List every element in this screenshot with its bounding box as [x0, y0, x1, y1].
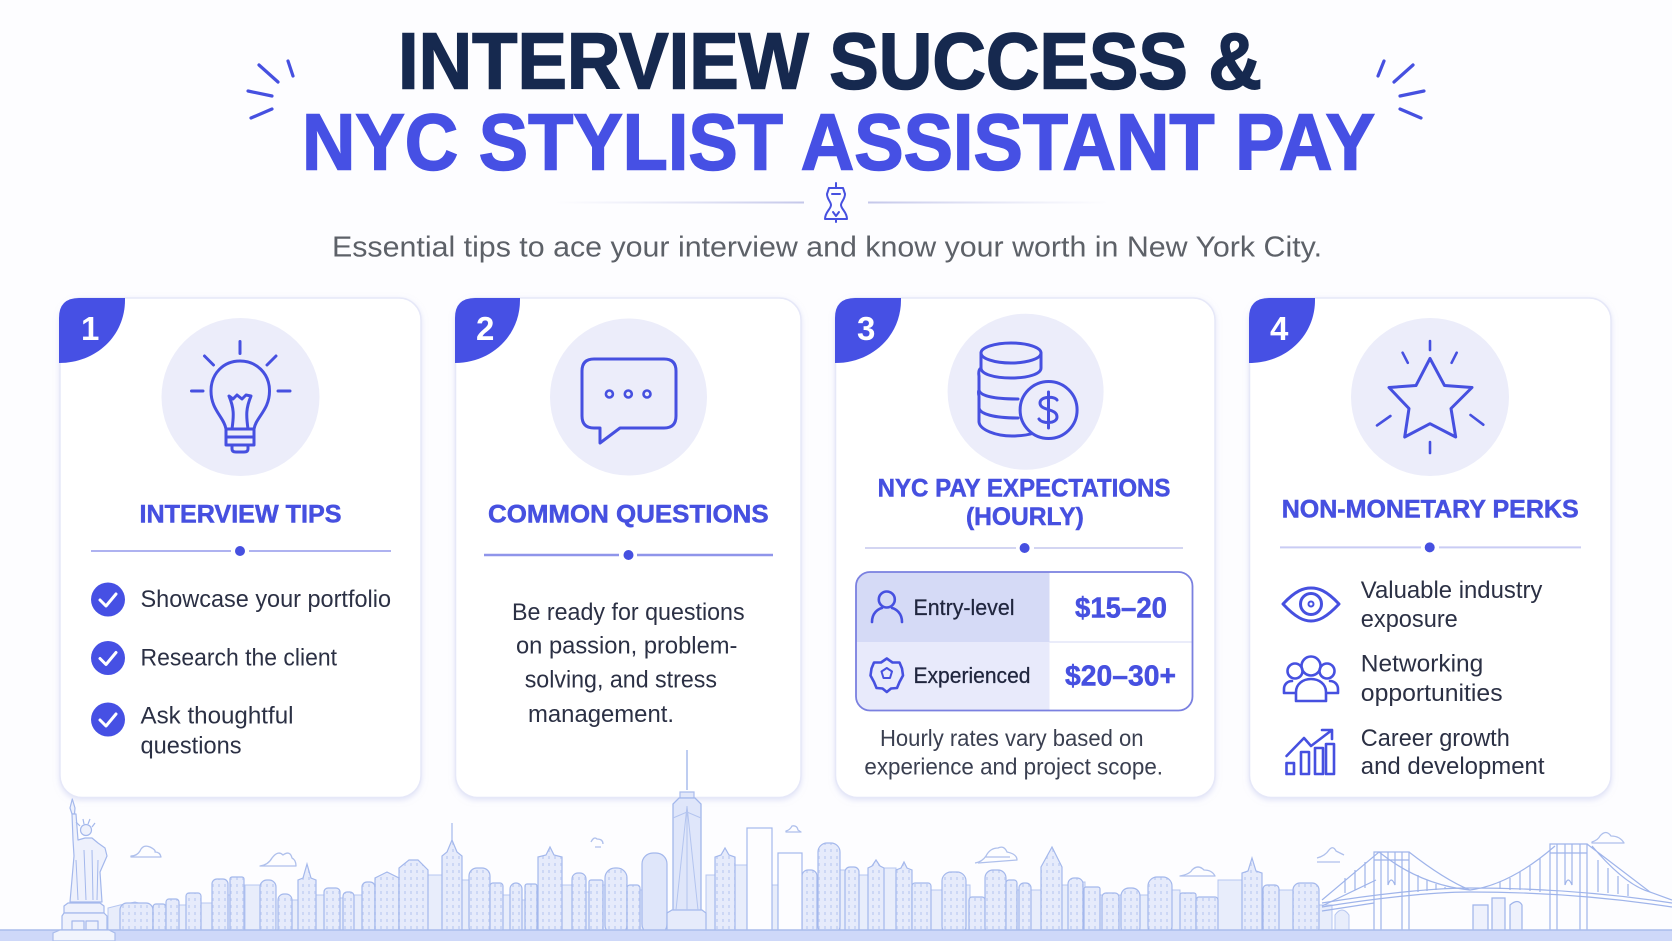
header divider with mannequin icon [555, 183, 1109, 222]
icon: dress form [825, 183, 847, 222]
statue base [53, 930, 115, 941]
icon: growth chart [1286, 730, 1334, 774]
heading: COMMON QUESTIONS [488, 501, 769, 529]
waterfront band [0, 930, 1672, 941]
divider [865, 543, 1183, 553]
body text: management. [528, 701, 674, 728]
icon: one world trade center [667, 750, 706, 935]
panel: pay expectations [835, 298, 1215, 798]
icon: person [872, 592, 902, 622]
title line 1: INTERVIEW SUCCESS & [398, 16, 1262, 106]
perk: career growth: and development [1361, 753, 1545, 780]
check item: questions: questions [140, 732, 242, 759]
body text: on passion, problem- [516, 633, 737, 660]
panel: interview tips [59, 298, 421, 798]
check item: portfolio: Showcase your portfolio [140, 586, 391, 613]
heading [878, 474, 1170, 531]
icon: statue of liberty [62, 799, 107, 935]
icon: eye [1283, 588, 1339, 621]
check item: research: Research the client [140, 644, 337, 671]
row label: entry-level background [856, 572, 1050, 642]
perk: industry exposure: Valuable industry [1361, 577, 1542, 604]
number badge 2 [455, 298, 520, 363]
icon: right sparkle rays [1378, 61, 1424, 118]
subtitle: Essential tips to ace your interview and know your worth in New York City. [332, 232, 1322, 264]
note: Hourly rates vary based on [880, 725, 1144, 751]
divider [1280, 542, 1581, 552]
perk: networking: opportunities [1361, 680, 1503, 707]
row label: experienced background [856, 642, 1050, 710]
label entry-level: Entry-level [914, 595, 1014, 620]
icon: speech bubble [550, 318, 707, 476]
icon: brooklyn bridge [1322, 844, 1672, 930]
checklist [91, 582, 391, 759]
value experienced: $20–30+ [1065, 660, 1176, 692]
glass towers [747, 828, 802, 935]
value entry-level: $15–20 [1075, 592, 1167, 624]
heading: (HOURLY) [966, 503, 1084, 531]
heading: NYC PAY EXPECTATIONS [878, 474, 1170, 502]
perk: networking [1284, 650, 1503, 707]
number badge 2: 2 [476, 310, 494, 347]
icon: award badge [870, 658, 903, 692]
title line 2: NYC STYLIST ASSISTANT PAY [302, 98, 1375, 186]
check item: questions [91, 702, 294, 759]
icon: star [1351, 318, 1509, 476]
skyline illustration [0, 750, 1672, 941]
perk: networking: Networking [1361, 650, 1483, 678]
heading: NON-MONETARY PERKS [1282, 495, 1579, 523]
check item: portfolio [91, 582, 391, 616]
clouds [131, 826, 1624, 876]
front buildings [120, 823, 1319, 935]
heading: INTERVIEW TIPS [140, 501, 342, 529]
icon: coins [948, 314, 1104, 470]
perk: career growth: Career growth [1361, 725, 1510, 752]
divider [484, 550, 773, 560]
number badge 4 [1249, 298, 1315, 363]
panel: non-monetary perks [1249, 298, 1611, 798]
back city layer [108, 865, 1349, 935]
title block [302, 16, 1375, 186]
panel: common questions [455, 298, 801, 798]
body text [512, 599, 745, 728]
body text: Be ready for questions [512, 599, 745, 626]
perk: career growth [1286, 725, 1545, 780]
body text: solving, and stress [525, 666, 717, 693]
icon: left sparkle rays [248, 61, 293, 118]
perk: industry exposure: exposure [1361, 606, 1458, 633]
icon: people [1284, 656, 1338, 701]
divider [91, 546, 391, 556]
perk: industry exposure [1283, 577, 1542, 633]
number badge 4: 4 [1270, 310, 1289, 347]
check item: questions: Ask thoughtful [140, 702, 294, 730]
number badge 3 [835, 298, 901, 363]
note: experience and project scope. [864, 754, 1163, 780]
number badge 1: 1 [81, 310, 99, 347]
pay table [856, 572, 1192, 710]
number badge 1 [59, 298, 125, 363]
icon: light bulb [162, 318, 320, 476]
label experienced: Experienced [914, 663, 1030, 688]
number badge 3: 3 [857, 310, 875, 347]
check item: research [91, 641, 337, 675]
note [864, 725, 1163, 780]
